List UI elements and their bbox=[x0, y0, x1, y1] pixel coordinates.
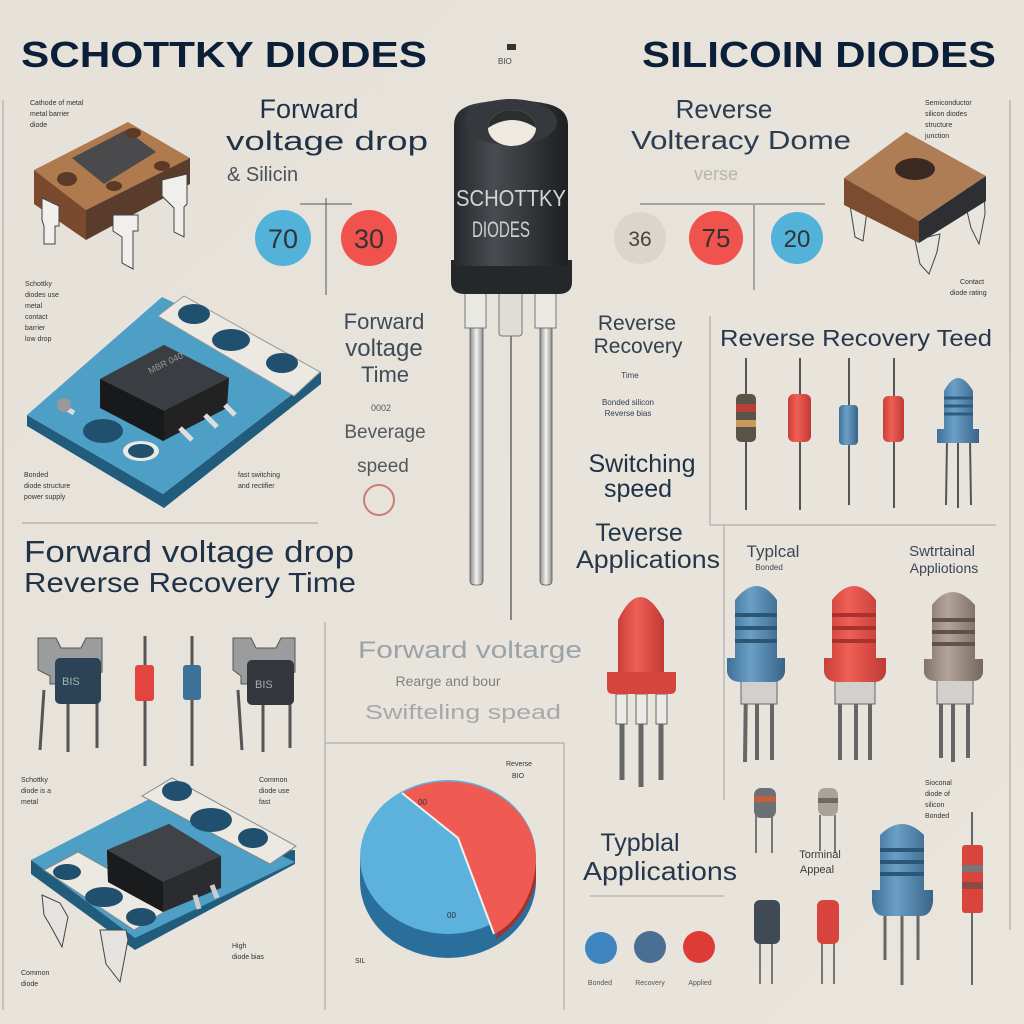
blurred chart title: forward voltage: Swifteling spead bbox=[365, 702, 561, 724]
icon: blue diode lower bbox=[872, 824, 933, 985]
label: reverse speed: 0002 bbox=[371, 403, 391, 413]
title: Silicon Diodes: SILICOIN DIODES bbox=[642, 34, 996, 75]
center label: BIO bbox=[498, 57, 512, 66]
small text left mid: contact bbox=[25, 314, 48, 321]
heading: forward voltage drop: voltage drop bbox=[226, 126, 428, 156]
pie chart caption bbox=[355, 761, 532, 965]
small text bottom left: diode is a bbox=[21, 788, 51, 795]
heading: typical bbox=[747, 542, 799, 572]
label: reverse speed bbox=[344, 403, 426, 515]
value circles right bbox=[614, 204, 825, 290]
icons: row of schottky components: BIS bbox=[62, 676, 80, 688]
heading: typical: Typlcal bbox=[747, 542, 799, 561]
subtext: and silicon: & Silicin bbox=[227, 164, 298, 186]
small text bottom left: diode use bbox=[259, 788, 289, 795]
icon: red axial diode lower bbox=[962, 812, 983, 985]
icons: row of schottky components bbox=[38, 636, 295, 766]
heading: reverse applications bbox=[576, 519, 720, 574]
small text board caption: diode structure bbox=[24, 483, 70, 490]
small text bottom left: Common bbox=[21, 970, 50, 977]
small text bottom left: High bbox=[232, 943, 247, 950]
small text right top: silicon diodes bbox=[925, 111, 968, 118]
value circles right: 20 bbox=[784, 226, 810, 253]
pie chart caption: Reverse bbox=[506, 761, 532, 768]
small text left mid bbox=[25, 281, 59, 343]
small text right top bbox=[924, 100, 987, 297]
heading: switching applications bbox=[909, 543, 978, 576]
heading: switching speed: Switching bbox=[588, 450, 696, 478]
heading: typical: Bonded bbox=[755, 563, 783, 572]
heading: reverse voltage: Reverse bbox=[676, 94, 772, 124]
label: terminal appeal: Appeal bbox=[800, 864, 834, 876]
value circles right: 36 bbox=[628, 228, 652, 251]
icon: tan diode row 1 bbox=[924, 592, 983, 762]
heading: forward voltage drop bbox=[226, 94, 428, 156]
heading: reverse voltage bbox=[631, 94, 851, 184]
icon: blue diode row 1 bbox=[727, 586, 785, 762]
pie chart bbox=[360, 780, 536, 958]
heading: forward voltage time: voltage bbox=[345, 335, 423, 362]
small text bottom left: fast bbox=[259, 799, 270, 806]
small text right top: Semiconductor bbox=[925, 100, 972, 107]
small text left top: diode bbox=[30, 122, 47, 129]
center label bbox=[498, 44, 516, 66]
heading: forward voltage time bbox=[344, 309, 424, 387]
blurred chart title: forward voltage: Forward voltarge bbox=[358, 637, 582, 664]
heading: switching applications: Swtrtainal bbox=[909, 543, 975, 560]
icon: dark small diode bbox=[754, 900, 780, 984]
small text bottom left: diode bbox=[21, 981, 38, 988]
icons: three round dots: Applied bbox=[688, 980, 712, 987]
small text left mid: low drop bbox=[25, 336, 52, 343]
small text right bottom bbox=[925, 780, 952, 820]
icon: blue circuit board bbox=[27, 296, 321, 508]
heading: reverse recovery: Time bbox=[621, 371, 639, 380]
icon: red diode row 1 bbox=[824, 586, 886, 760]
heading: reverse recovery: Bonded silicon bbox=[602, 398, 654, 407]
heading: typical applications: Typblal bbox=[600, 829, 680, 857]
small text bottom left: Common bbox=[259, 777, 288, 784]
small text left top: Cathode of metal bbox=[30, 100, 84, 107]
icon: top-right component bbox=[844, 132, 986, 274]
small text right top: structure bbox=[925, 122, 952, 129]
heading: switching applications: Appliotions bbox=[910, 560, 978, 576]
icon: blue circuit board: MBR 040 bbox=[146, 350, 185, 376]
icons: three round dots: Bonded bbox=[588, 980, 612, 987]
heading: reverse recovery: Recovery bbox=[594, 335, 683, 358]
small text right bottom: Bonded bbox=[925, 813, 949, 820]
heading: reverse voltage: verse bbox=[694, 164, 738, 184]
heading: typical applications bbox=[583, 829, 737, 886]
heading: forward voltage time: Time bbox=[361, 362, 409, 387]
icon: large red diode bbox=[607, 597, 676, 787]
icon: top-left component bbox=[34, 122, 190, 269]
icons: row of axial diodes bbox=[736, 358, 979, 510]
heading: typical applications: Applications bbox=[583, 856, 737, 886]
small text bottom left: metal bbox=[21, 799, 39, 806]
title: Schottky Diodes: SCHOTTKY DIODES bbox=[21, 34, 427, 75]
small text board caption: and rectifier bbox=[238, 483, 275, 490]
heading: reverse recovery bbox=[594, 312, 683, 418]
pie chart caption: SIL bbox=[355, 958, 366, 965]
heading: forward voltage drop, reverse recovery time bbox=[24, 534, 356, 598]
icons: small diodes upper bbox=[754, 788, 838, 853]
heading: forward voltage drop: Forward bbox=[259, 94, 359, 124]
label: reverse speed: speed bbox=[357, 456, 409, 477]
blurred chart title: forward voltage bbox=[358, 637, 582, 724]
small text bottom left bbox=[21, 777, 289, 988]
heading: reverse recovery teed: Reverse Recovery Teed bbox=[720, 325, 992, 351]
pie chart caption: BIO bbox=[512, 773, 525, 780]
pie chart: 00 bbox=[418, 798, 427, 807]
blurred chart title: forward voltage: Rearge and bour bbox=[395, 673, 501, 689]
heading: reverse recovery: Reverse bias bbox=[605, 409, 651, 418]
heading: forward voltage drop, reverse recovery time: Reverse Recovery Time bbox=[24, 567, 356, 598]
small text right top: Contact bbox=[960, 279, 984, 286]
heading: forward voltage drop, reverse recovery time: Forward voltage drop bbox=[24, 534, 354, 569]
value circles left bbox=[255, 198, 397, 295]
icons: three round dots bbox=[585, 931, 715, 987]
label: terminal appeal bbox=[799, 849, 841, 876]
icons: row of schottky components: BIS bbox=[255, 679, 273, 691]
small text left mid: diodes use bbox=[25, 292, 59, 299]
small text bottom left: diode bias bbox=[232, 954, 264, 961]
value circles left: 70 bbox=[268, 224, 298, 254]
central large diode: DIODES bbox=[472, 217, 530, 242]
heading: forward voltage time: Forward bbox=[344, 309, 424, 334]
heading: reverse applications: Applications bbox=[576, 546, 720, 574]
label: terminal appeal: Torminal bbox=[799, 849, 841, 861]
heading: reverse voltage: Volteracy Dome bbox=[631, 125, 851, 155]
heading: switching speed bbox=[588, 450, 696, 503]
small text right bottom: silicon bbox=[925, 802, 945, 809]
icon: bottom circuit board bbox=[31, 778, 296, 982]
small text left top: metal barrier bbox=[30, 111, 70, 118]
small text left top bbox=[30, 100, 84, 129]
small text board caption bbox=[24, 472, 280, 501]
small text left mid: metal bbox=[25, 303, 43, 310]
value circles right: 75 bbox=[702, 223, 730, 253]
small text bottom left: Schottky bbox=[21, 777, 48, 784]
heading: switching speed: speed bbox=[604, 475, 672, 503]
small text left mid: barrier bbox=[25, 325, 46, 332]
value circles left: 30 bbox=[354, 224, 384, 254]
small text right top: junction bbox=[924, 133, 949, 140]
heading: reverse applications: Teverse bbox=[595, 519, 683, 547]
small text right bottom: Sioconal bbox=[925, 780, 952, 787]
small text board caption: fast switching bbox=[238, 472, 280, 479]
small text right bottom: diode of bbox=[925, 791, 950, 798]
small text right top: diode rating bbox=[950, 290, 987, 297]
label: reverse speed: Beverage bbox=[344, 422, 426, 443]
icon: red small diode bbox=[817, 900, 839, 984]
small text board caption: power supply bbox=[24, 494, 66, 501]
small text board caption: Bonded bbox=[24, 472, 48, 479]
icons: three round dots: Recovery bbox=[635, 980, 665, 987]
central large diode bbox=[451, 99, 572, 620]
heading: reverse recovery: Reverse bbox=[598, 312, 676, 335]
pie chart: 00 bbox=[447, 911, 456, 920]
small text left mid: Schottky bbox=[25, 281, 52, 288]
central large diode: SCHOTTKY bbox=[456, 185, 566, 211]
